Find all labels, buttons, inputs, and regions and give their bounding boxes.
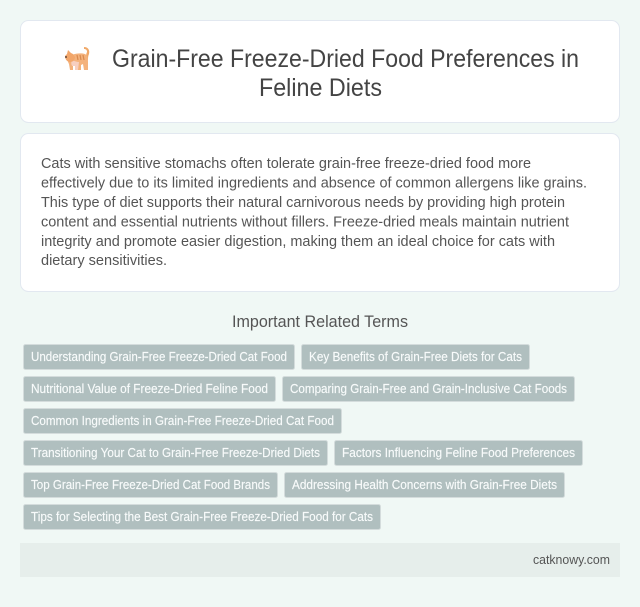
- tag: [24, 472, 278, 498]
- title text: Grain-Free Freeze-Dried Food Preferences in: [112, 45, 579, 73]
- tag list: [24, 344, 582, 530]
- tag: [24, 440, 328, 466]
- description text: integrity and promote easier digestion, making them an ideal choice for cats with: [41, 234, 555, 250]
- tag: Factors Influencing Feline Food Preferences: [342, 446, 575, 460]
- description text: effectively due to its limited ingredients and absence of common allergens like grains.: [41, 176, 587, 192]
- description text: Cats with sensitive stomachs often tolerate grain-free freeze-dried food more: [41, 156, 531, 172]
- description text: dietary sensitivities.: [41, 253, 167, 269]
- tag: Understanding Grain-Free Freeze-Dried Cat Food: [31, 350, 287, 364]
- tag: Top Grain-Free Freeze-Dried Cat Food Brands: [31, 478, 270, 492]
- tag: [24, 376, 276, 402]
- title text: [112, 45, 579, 102]
- description text: This type of diet supports their natural carnivorous needs by providing high protein: [41, 195, 565, 211]
- description text: content and essential nutrients without fillers. Freeze-dried meals maintain nutrient: [41, 214, 569, 230]
- tag: Key Benefits of Grain-Free Diets for Cats: [309, 350, 522, 364]
- tag: [302, 344, 530, 370]
- heading: related terms: Important Related Terms: [232, 313, 408, 331]
- tag: [24, 408, 342, 434]
- tag: Transitioning Your Cat to Grain-Free Freeze-Dried Diets: [31, 446, 320, 460]
- tag: [24, 344, 294, 370]
- tag: Nutritional Value of Freeze-Dried Feline Food: [31, 382, 268, 396]
- icon: cat: [65, 47, 89, 70]
- description text: [41, 156, 587, 269]
- footer: [20, 543, 620, 577]
- tag: [282, 376, 574, 402]
- tag: [284, 472, 564, 498]
- tag: Tips for Selecting the Best Grain-Free Freeze-Dried Food for Cats: [31, 510, 373, 524]
- title text: Feline Diets: [259, 74, 382, 102]
- panel: title card: [20, 20, 620, 122]
- tag: Addressing Health Concerns with Grain-Free Diets: [292, 478, 557, 492]
- panel: description: [20, 134, 620, 292]
- footer text: catknowy.com: [533, 552, 610, 567]
- tag: Comparing Grain-Free and Grain-Inclusive Cat Foods: [290, 382, 567, 396]
- tag: [334, 440, 582, 466]
- tag: Common Ingredients in Grain-Free Freeze-Dried Cat Food: [31, 414, 334, 428]
- tag: [24, 504, 380, 530]
